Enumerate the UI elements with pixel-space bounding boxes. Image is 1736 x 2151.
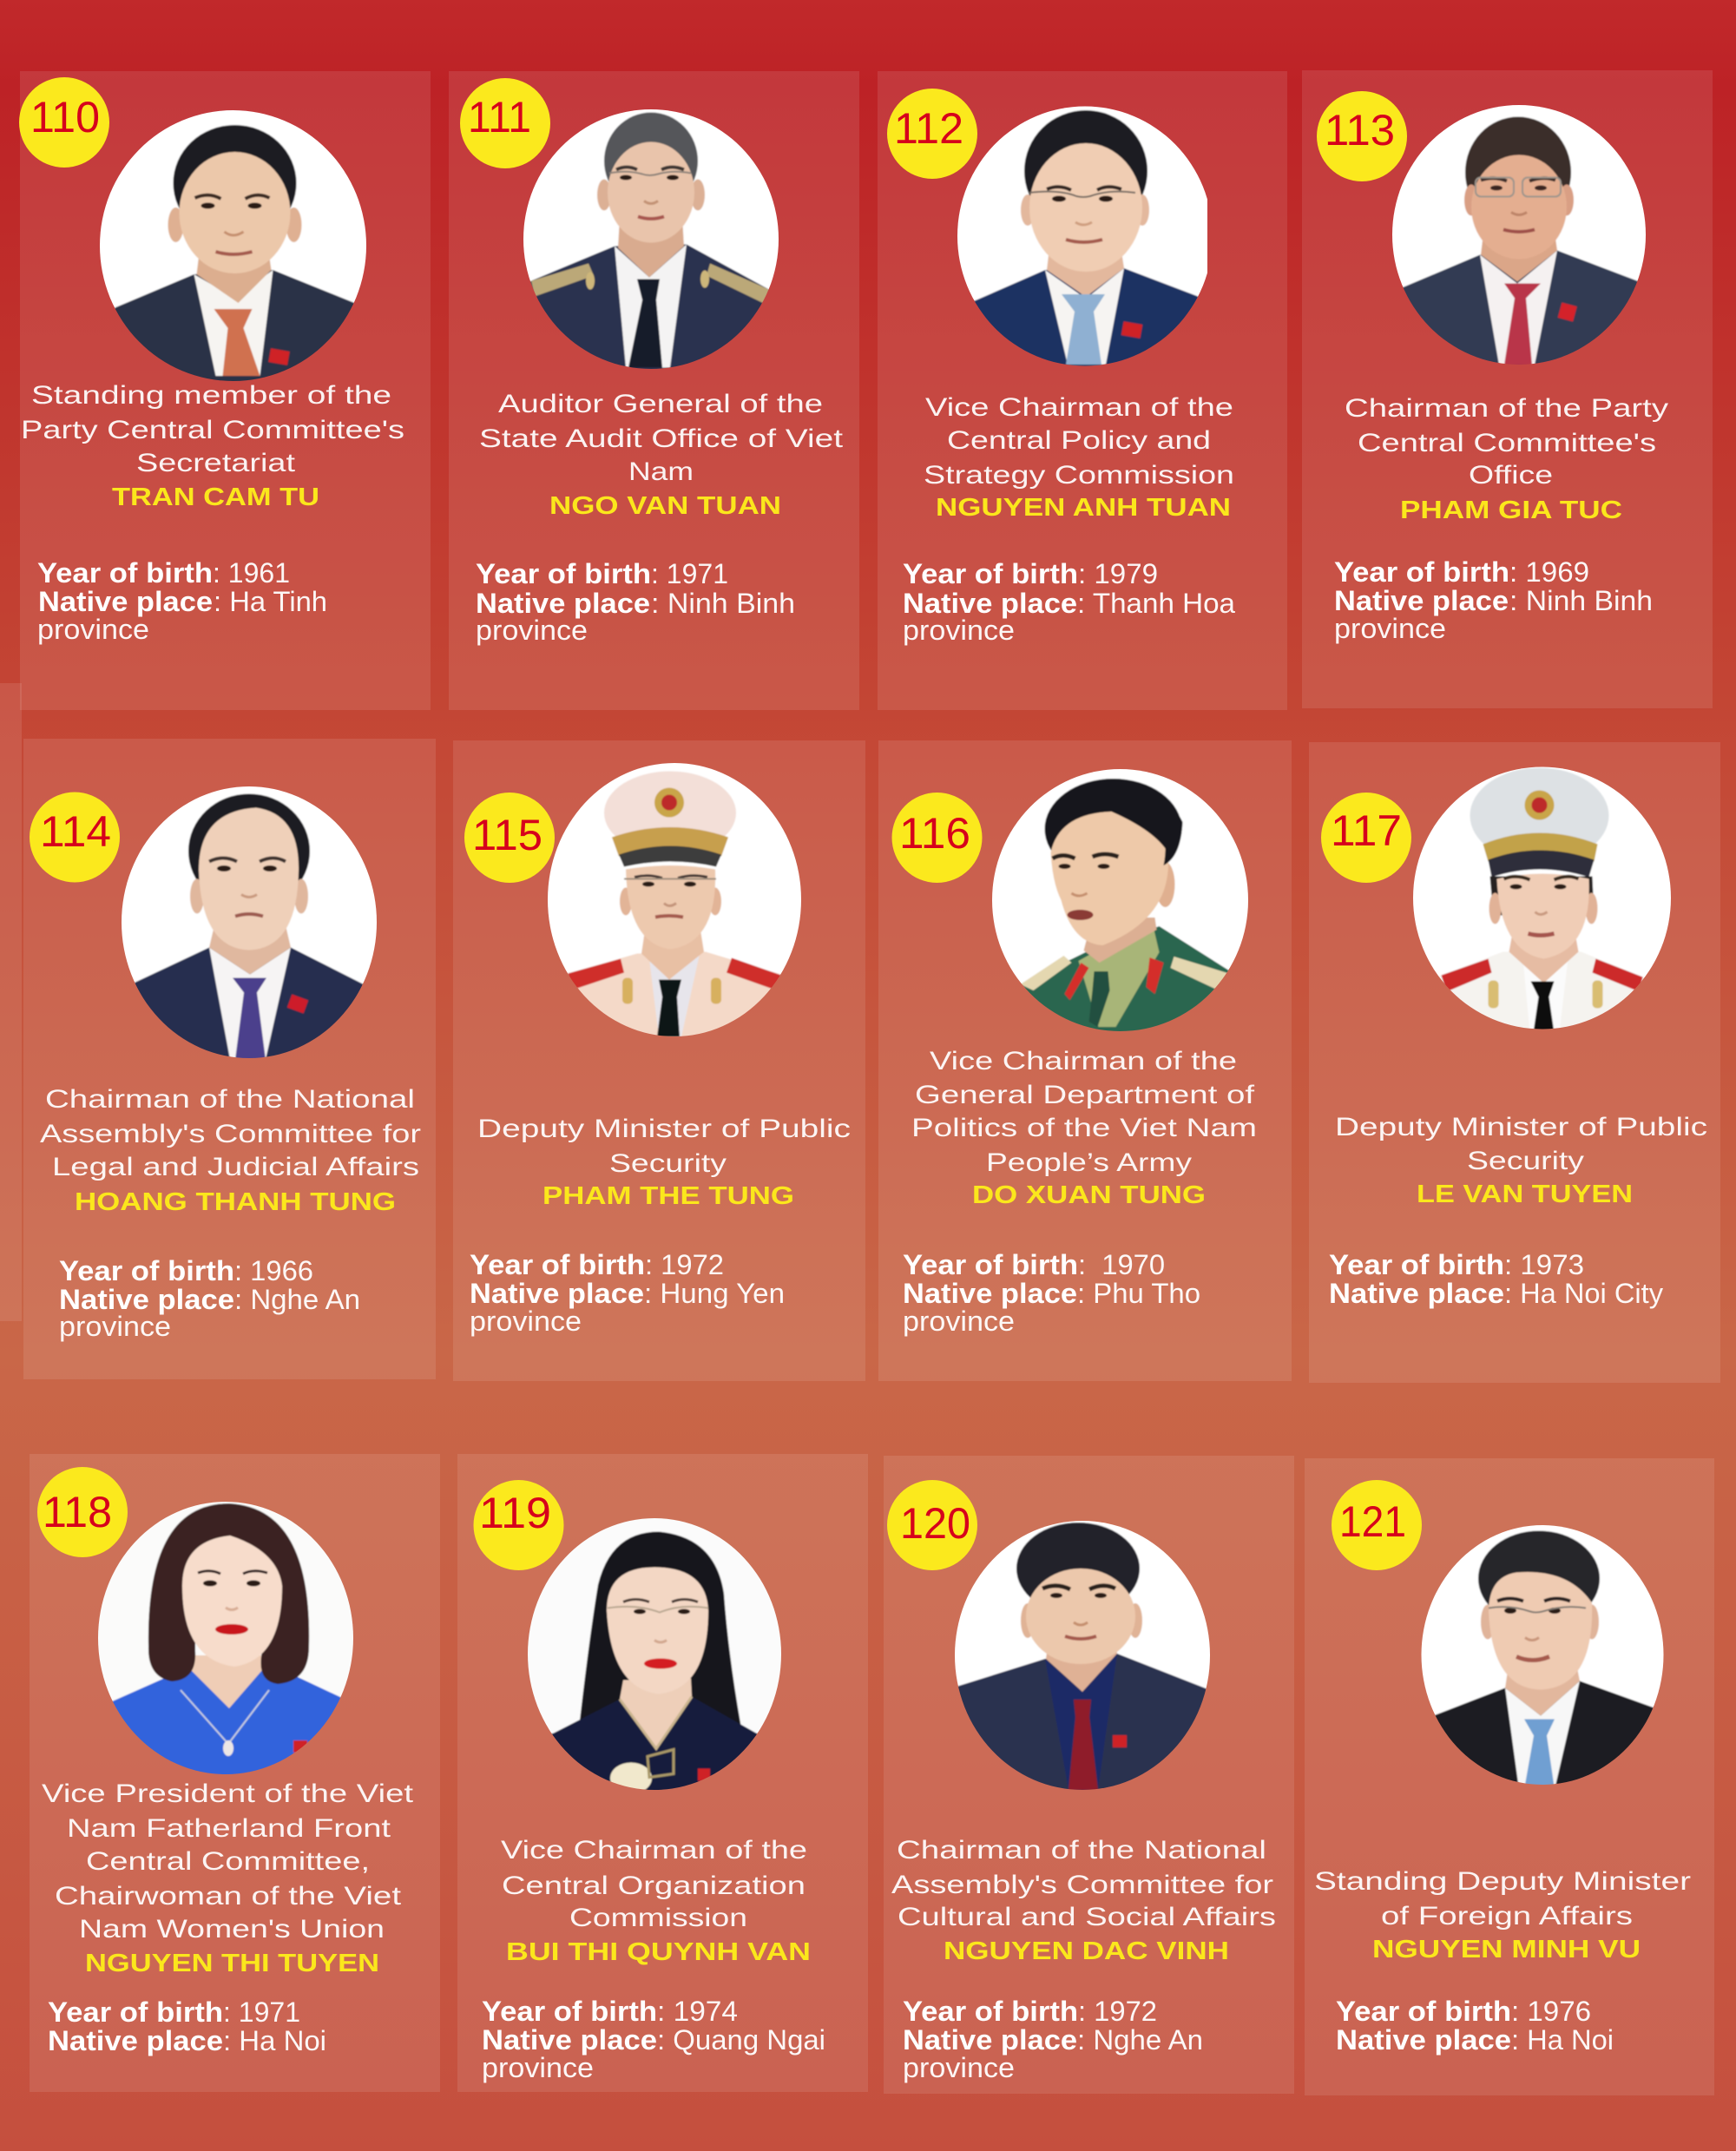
birth and native place: Native place: [482, 2024, 657, 2056]
role text: Security: [609, 1149, 727, 1178]
card background: [1305, 1458, 1714, 2095]
panel: card 112: [878, 71, 1287, 710]
role text: [891, 1836, 1276, 1931]
name: NGUYEN ANH TUAN: [936, 494, 1231, 522]
portrait: Pham The Tung: [548, 763, 801, 1036]
number badge 111: [460, 78, 550, 168]
number badge 121: [1332, 1480, 1422, 1570]
panel: card 114: [23, 739, 436, 1379]
birth and native place: province: [476, 615, 588, 646]
panel: card 116: [878, 740, 1292, 1381]
portrait: Nguyen Minh Vu: [1422, 1525, 1663, 1785]
role text: [1314, 1867, 1691, 1931]
left edge panel strip: [0, 683, 22, 1321]
birth and native place: : Phu Tho: [1077, 1278, 1200, 1309]
role text: Central Policy and: [947, 426, 1211, 455]
number badge 121: 121: [1339, 1497, 1406, 1546]
role text: General Department of: [915, 1081, 1255, 1109]
role text: Standing Deputy Minister: [1314, 1867, 1691, 1896]
role text: Security: [1467, 1147, 1584, 1175]
birth and native place: province: [1334, 613, 1446, 644]
birth and native place: Native place: [903, 2024, 1077, 2056]
birth and native place: Year of birth: [37, 557, 213, 589]
role text: Strategy Commission: [924, 461, 1234, 490]
birth and native place: : 1979: [1078, 558, 1158, 589]
role text: [42, 1779, 414, 1944]
role text: Politics of the Viet Nam: [911, 1114, 1257, 1142]
birth and native place: Year of birth: [1336, 1996, 1511, 2027]
card background: [1302, 70, 1713, 708]
birth and native place: : Ha Noi: [1511, 2024, 1614, 2056]
role text: Vice President of the Viet: [42, 1779, 414, 1808]
role text: Chairman of the Party: [1345, 394, 1668, 423]
birth and native place: province: [470, 1306, 582, 1337]
role text: [501, 1836, 807, 1932]
card background: [884, 1456, 1294, 2094]
panel: card 110: [19, 71, 431, 710]
birth and native place: Native place: [48, 2025, 223, 2056]
birth and native place: : 1973: [1504, 1249, 1584, 1280]
number badge 113: 113: [1325, 106, 1395, 155]
birth and native place: Native place: [470, 1278, 644, 1309]
panel: card 120: [884, 1456, 1294, 2094]
number badge 115: 115: [472, 811, 542, 859]
role text: Standing member of the: [31, 381, 391, 410]
name: NGUYEN THI TUYEN: [85, 1950, 379, 1977]
name: HOANG THANH TUNG: [75, 1188, 396, 1216]
role text: Chairwoman of the Viet: [55, 1882, 402, 1911]
birth and native place: province: [903, 2052, 1015, 2083]
birth and native place: : Hung Yen: [644, 1278, 785, 1309]
number badge 117: [1321, 793, 1411, 883]
portrait: Nguyen Dac Vinh: [955, 1521, 1210, 1790]
birth and native place: Native place: [476, 588, 650, 619]
portrait: Nguyen Thi Tuyen: [87, 1499, 365, 1777]
name: PHAM GIA TUC: [1400, 497, 1622, 524]
role text: [1335, 1113, 1707, 1175]
birth and native place: province: [59, 1311, 171, 1342]
role text: Legal and Judicial Affairs: [52, 1153, 419, 1181]
card background: [449, 71, 859, 710]
role text: Auditor General of the: [498, 390, 823, 418]
name: TRAN CAM TU: [112, 483, 319, 511]
role text: Office: [1469, 461, 1553, 490]
role text: Secretariat: [136, 449, 296, 477]
name: LE VAN TUYEN: [1417, 1181, 1633, 1208]
number badge 115: [464, 793, 555, 883]
role text: Central Committee's: [1358, 429, 1656, 457]
number badge 119: 119: [479, 1489, 551, 1537]
birth and native place: province: [903, 615, 1015, 646]
birth and native place: [1329, 1249, 1663, 1309]
birth and native place: Native place: [1336, 2024, 1511, 2056]
role text: [911, 1047, 1257, 1177]
role text: [40, 1085, 421, 1181]
birth and native place: : 1971: [651, 558, 728, 589]
birth and native place: [37, 557, 327, 645]
birth and native place: [59, 1255, 360, 1342]
panel: card 121: [1305, 1458, 1714, 2095]
number badge 114: 114: [40, 807, 111, 856]
birth and native place: Year of birth: [1334, 556, 1509, 588]
birth and native place: Year of birth: [48, 1996, 223, 2028]
birth and native place: Native place: [903, 1278, 1077, 1309]
role text: Nam Fatherland Front: [67, 1814, 391, 1843]
birth and native place: Year of birth: [903, 1249, 1078, 1280]
role text: Chairman of the National: [45, 1085, 415, 1114]
birth and native place: [903, 558, 1235, 646]
birth and native place: province: [37, 614, 149, 645]
role text: People’s Army: [986, 1148, 1192, 1177]
panel: card 113: [1302, 70, 1713, 708]
birth and native place: : Quang Ngai: [657, 2024, 825, 2056]
panel: card 118: [30, 1454, 440, 2092]
birth and native place: : 1972: [645, 1249, 724, 1280]
role text: Assembly's Committee for: [891, 1871, 1273, 1899]
birth and native place: : 1961: [213, 557, 290, 589]
card background: [23, 739, 436, 1379]
birth and native place: : 1970: [1078, 1249, 1165, 1280]
card background: [878, 740, 1292, 1381]
birth and native place: [1334, 556, 1653, 644]
portrait: Bui Thi Quynh Van: [528, 1518, 781, 1790]
birth and native place: : 1966: [234, 1255, 313, 1286]
role text: Party Central Committee's: [21, 416, 404, 444]
portrait: Pham Gia Tuc: [1392, 105, 1646, 365]
name: NGUYEN MINH VU: [1372, 1936, 1641, 1964]
birth and native place: province: [482, 2052, 594, 2083]
birth and native place: [903, 1996, 1203, 2083]
birth and native place: : Nghe An: [1077, 2024, 1203, 2056]
card background: [457, 1454, 868, 2092]
portrait: Ngo Van Tuan: [523, 109, 779, 369]
portrait: Hoang Thanh Tung: [122, 786, 377, 1058]
number badge 110: 110: [30, 93, 100, 141]
role text: Central Committee,: [86, 1847, 370, 1876]
card background: [878, 71, 1287, 710]
birth and native place: : Ha Noi City: [1504, 1278, 1663, 1309]
birth and native place: Year of birth: [476, 558, 651, 589]
role text: [477, 1115, 851, 1178]
role text: [479, 390, 844, 486]
birth and native place: Native place: [1329, 1278, 1504, 1309]
panel: card 119: [457, 1454, 868, 2092]
panel: card 115: [453, 740, 865, 1381]
role text: Vice Chairman of the: [501, 1836, 807, 1865]
number badge 114: [30, 792, 120, 882]
birth and native place: [476, 558, 795, 646]
name: DO XUAN TUNG: [972, 1181, 1206, 1209]
birth and native place: : Thanh Hoa: [1077, 588, 1235, 619]
role text: Vice Chairman of the: [925, 393, 1233, 422]
role text: [1345, 394, 1668, 490]
role text: Vice Chairman of the: [930, 1047, 1237, 1076]
card background: [20, 71, 431, 710]
number badge 111: 111: [468, 93, 531, 141]
role text: Central Organization: [502, 1871, 806, 1900]
number badge 112: [887, 89, 977, 179]
birth and native place: [470, 1249, 785, 1337]
role text: Deputy Minister of Public: [1335, 1113, 1707, 1141]
birth and native place: : Nghe An: [234, 1284, 360, 1315]
role text: [924, 393, 1234, 490]
name: BUI THI QUYNH VAN: [506, 1938, 811, 1966]
portrait: Le Van Tuyen: [1413, 767, 1671, 1029]
role text: Nam: [628, 457, 694, 486]
portrait: Tran Cam Tu: [90, 107, 377, 386]
card background: [1309, 742, 1720, 1383]
portrait: Nguyen Anh Tuan: [957, 106, 1207, 366]
role text: Deputy Minister of Public: [477, 1115, 851, 1143]
birth and native place: Year of birth: [903, 1996, 1078, 2027]
birth and native place: [903, 1249, 1200, 1337]
number badge 110: [19, 77, 109, 168]
card background: [453, 740, 865, 1381]
role text: of Foreign Affairs: [1381, 1902, 1633, 1931]
birth and native place: Year of birth: [903, 558, 1078, 589]
birth and native place: : 1969: [1509, 556, 1589, 588]
birth and native place: : Ha Noi: [223, 2025, 326, 2056]
birth and native place: Year of birth: [470, 1249, 645, 1280]
role text: Assembly's Committee for: [40, 1120, 421, 1148]
number badge 116: [892, 793, 983, 883]
birth and native place: Native place: [1334, 585, 1509, 616]
number badge 119: [474, 1480, 564, 1570]
number badge 120: [887, 1480, 977, 1570]
role text: [21, 381, 404, 477]
birth and native place: Native place: [903, 588, 1077, 619]
birth and native place: : Ha Tinh: [214, 586, 327, 617]
number badge 118: [37, 1467, 128, 1557]
birth and native place: [1336, 1996, 1614, 2056]
name: NGO VAN TUAN: [549, 492, 781, 520]
birth and native place: Year of birth: [1329, 1249, 1504, 1280]
birth and native place: : 1976: [1511, 1996, 1591, 2027]
birth and native place: province: [903, 1306, 1015, 1337]
number badge 113: [1317, 91, 1407, 181]
birth and native place: : 1972: [1078, 1996, 1157, 2027]
birth and native place: [482, 1996, 825, 2083]
birth and native place: Year of birth: [59, 1255, 234, 1286]
number badge 118: 118: [43, 1488, 112, 1536]
birth and native place: : Ninh Binh: [1509, 585, 1653, 616]
role text: Cultural and Social Affairs: [898, 1903, 1276, 1931]
number badge 116: 116: [899, 809, 970, 858]
number badge 117: 117: [1331, 806, 1402, 855]
birth and native place: : 1974: [657, 1996, 738, 2027]
birth and native place: Native place: [38, 586, 213, 617]
role text: Chairman of the National: [897, 1836, 1266, 1865]
panel: card 111: [449, 71, 859, 710]
role text: Nam Women's Union: [79, 1915, 385, 1944]
birth and native place: : 1971: [223, 1996, 300, 2028]
number badge 112: 112: [894, 104, 963, 153]
birth and native place: Native place: [59, 1284, 234, 1315]
name: PHAM THE TUNG: [542, 1182, 794, 1210]
card background: [30, 1454, 440, 2092]
birth and native place: Year of birth: [482, 1996, 657, 2027]
role text: State Audit Office of Viet: [479, 424, 844, 453]
birth and native place: [48, 1996, 326, 2056]
role text: Commission: [569, 1904, 747, 1932]
number badge 120: 120: [900, 1499, 970, 1548]
panel: card 117: [1309, 742, 1720, 1383]
birth and native place: : Ninh Binh: [651, 588, 795, 619]
name: NGUYEN DAC VINH: [944, 1937, 1229, 1965]
portrait: Do Xuan Tung: [992, 769, 1248, 1031]
